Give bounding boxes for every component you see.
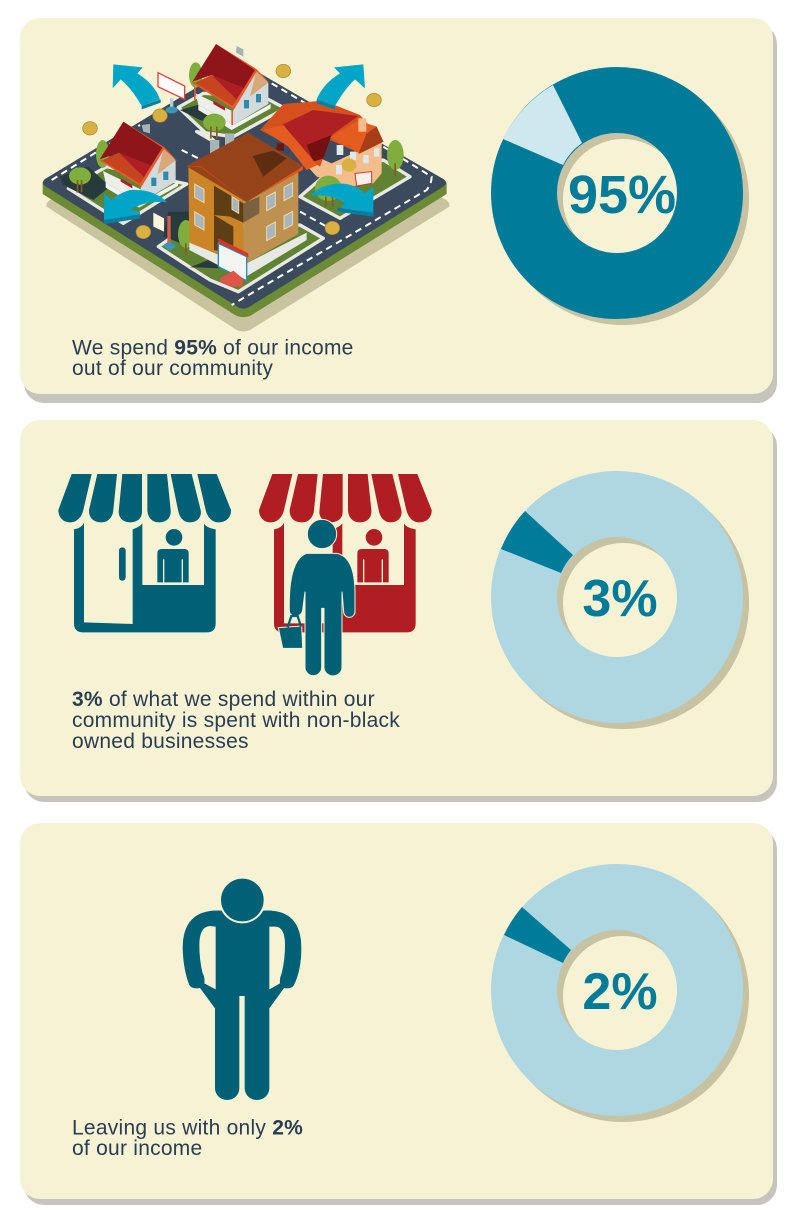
caption: panel one: out of our community [72,357,273,380]
icon: red storefront with shopper [259,474,432,676]
trees [69,114,342,255]
rear house [189,44,272,130]
right houses [260,101,404,187]
value: 3% [582,570,658,628]
panel: what is left [20,823,777,1205]
caption: panel three: of our income [72,1137,202,1160]
panel: income spent outside community [20,18,777,403]
donut chart: 3% [491,471,749,729]
coins [83,64,381,239]
caption: panel two: 3% of what we spend within our [72,688,375,711]
donut chart: 95% [491,67,749,325]
arrows leaving the community [104,64,373,224]
icon: man with empty pockets [183,878,301,1100]
caption: panel two: community is spent with non-black [72,709,400,732]
panel: spending within community [20,420,777,802]
value: 2% [582,963,658,1021]
front house [186,133,307,287]
donut chart: 2% [491,864,749,1122]
value: 95% [568,165,676,225]
caption: panel one: We spend 95% of our income [72,336,354,360]
caption: panel three: Leaving us with only 2% [72,1116,303,1140]
small signs [153,73,185,251]
illustration: isometric neighbourhood [43,44,450,332]
caption: panel two: owned businesses [72,730,249,753]
left house [96,122,179,208]
icon: teal storefront [58,474,231,632]
